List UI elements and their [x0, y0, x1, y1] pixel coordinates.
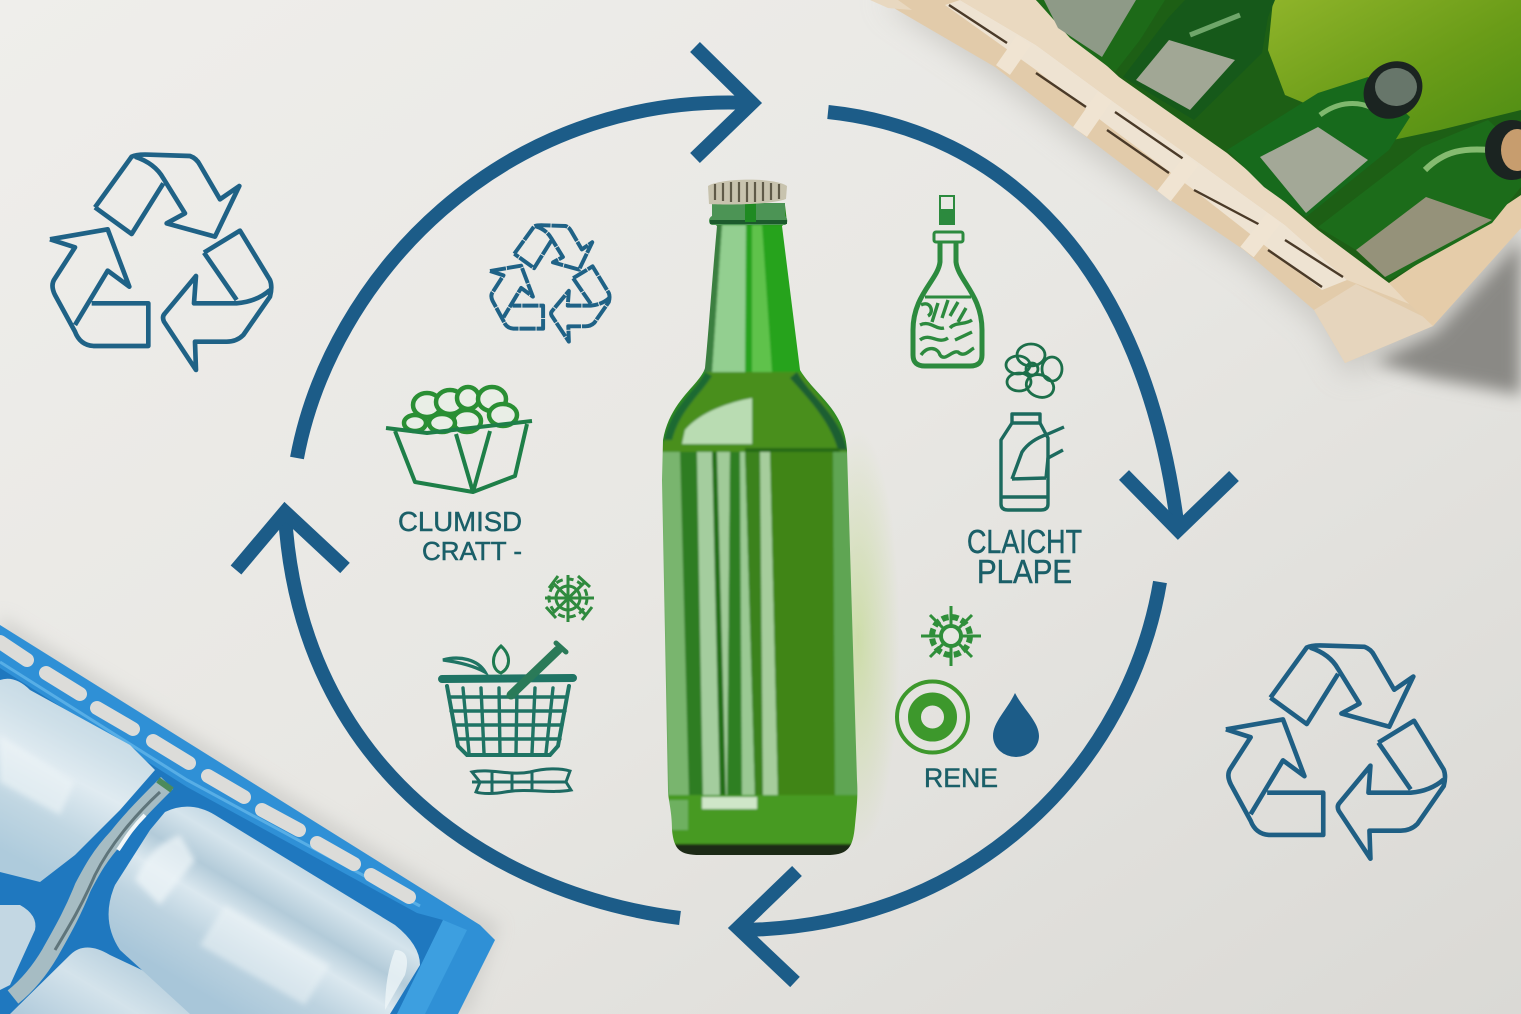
leaf: [493, 646, 509, 673]
lip: [934, 232, 963, 242]
floor shadow: lower right of wood crate: [1375, 240, 1521, 395]
bottom highlight: [702, 797, 757, 809]
green glow beside bottle: [816, 430, 900, 850]
glass scribbles: [920, 300, 974, 357]
cycle arrow: bottom left: [236, 512, 680, 918]
crate ribs: [1003, 40, 1274, 252]
bottle 1: [1036, 0, 1165, 72]
crate shadow: blue: [0, 615, 500, 1014]
crate shadow: wood: [880, 0, 1521, 375]
crate top-left scrap: [870, 0, 912, 10]
icon: green ring: [897, 682, 968, 752]
crate slots: [949, 5, 1343, 287]
bottle mouth 4: [1485, 120, 1521, 180]
bottle 2: [1123, 0, 1275, 120]
shoulder highlight: [682, 398, 752, 444]
crate end block: [1314, 284, 1433, 363]
icon: shopping basket: [442, 643, 573, 794]
basket grid: [449, 688, 567, 753]
label: CLUMISD CRATT: CLUMISD: [398, 506, 522, 537]
icon: green branching particle: [545, 575, 594, 622]
body stripes: [660, 452, 690, 800]
bottle necks: [13, 780, 172, 997]
bottle mouth 3: [1352, 49, 1434, 131]
bottle base dark: [675, 842, 852, 855]
cloth: [472, 769, 571, 794]
box: [386, 421, 532, 492]
icon: crate of crushed glass: [386, 387, 532, 492]
large lime bottle: [1268, 0, 1521, 140]
neck edge: [703, 225, 722, 373]
crate rim line: [0, 662, 420, 906]
label: CLAICHT PLAPE: [967, 523, 1082, 590]
icon: flower cluster: [1006, 344, 1062, 401]
shoulder dark left: [664, 372, 712, 440]
clear bottle: lower left: [0, 905, 35, 990]
shoulder dark right: [790, 372, 847, 450]
label: CLAICHT PLAPE: CLAICHT: [967, 523, 1082, 560]
bottle outline: [913, 242, 982, 366]
panel: blue crate with clear bottles: [0, 625, 495, 1014]
neck lip: [709, 203, 787, 225]
neck right pale reflection: [752, 225, 772, 372]
bottle bottom band: [660, 795, 860, 845]
icon: water drop: [993, 693, 1039, 757]
bottle 4: [1318, 120, 1521, 280]
swoosh: [443, 658, 485, 672]
crate pale slat bars: [945, 0, 1347, 290]
crate inner floor: [0, 668, 443, 1014]
fill line: [925, 296, 971, 298]
label: CLAICHT PLAPE: PLAPE: [977, 553, 1072, 590]
liquid band dark: [744, 448, 840, 453]
crate frame: [0, 625, 495, 1014]
icon: large recycle symbol right: [1226, 645, 1445, 859]
panel: wooden crate with green bottles: [870, 0, 1521, 363]
neck glass: [702, 225, 803, 376]
label: CLUMISD CRATT: CRATT -: [422, 536, 522, 566]
icon: bottle with glass pieces: [913, 196, 982, 366]
shoulder liquid: [660, 372, 848, 460]
bottle base colour: [662, 205, 847, 796]
crate slots: [0, 642, 409, 897]
clear bottle: bottom: [10, 948, 235, 1014]
icon: jar with feather: [1001, 414, 1064, 510]
bottle 3: [1227, 77, 1410, 217]
crate rim: [960, 0, 1412, 305]
crate right wall: [1389, 195, 1521, 326]
icon: spiky wheel: [921, 606, 981, 666]
basket rim: [442, 678, 573, 679]
stopper: [940, 196, 954, 224]
clear bottle: upper: [0, 679, 155, 882]
crate interior: [1036, 0, 1521, 283]
handle: [511, 650, 558, 695]
cycle arrow: top left: [297, 47, 752, 458]
bottom left pale: [668, 800, 688, 830]
basket body: [447, 686, 569, 755]
icon: small recycle symbol: [490, 225, 610, 342]
clear bottle: large: [109, 807, 420, 1014]
icon: large recycle symbol left: [50, 155, 271, 370]
crate body: [880, 0, 1521, 363]
bottle cap: [708, 180, 787, 204]
crate right wall: [397, 920, 467, 1014]
central green glass bottle: [662, 180, 858, 855]
cycle arrow: top right: [828, 112, 1234, 530]
neck left pale reflection: [712, 225, 746, 372]
label: RENE: RENE: [924, 763, 998, 793]
glass pieces: [404, 387, 517, 432]
label: CLUMISD CRATT: [398, 506, 522, 566]
cycle arrow: bottom right: [738, 582, 1160, 982]
